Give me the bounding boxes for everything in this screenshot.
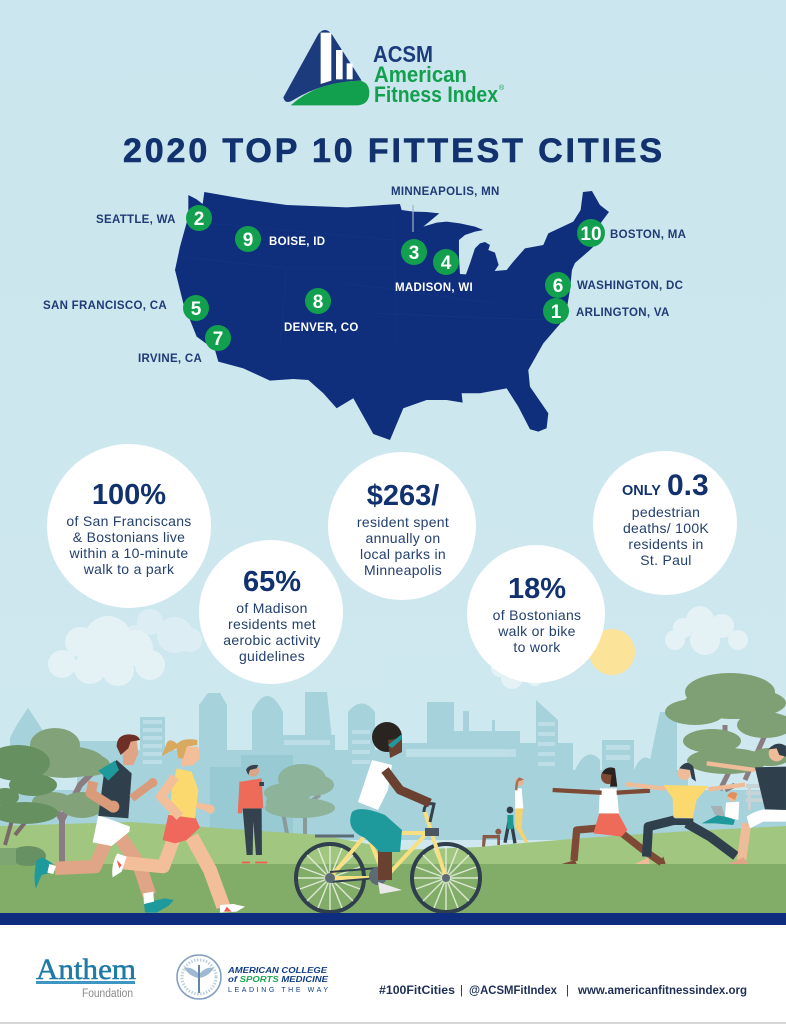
map marker: 10 Boston: [577, 219, 686, 247]
ground: dark green: [0, 864, 786, 913]
map marker: 4 Madison: MADISON, WI: [395, 282, 473, 294]
person: male runner: [34, 734, 174, 913]
footer links: @ACSMFitIndex: [469, 985, 558, 997]
stat circle: only 0.3: [593, 451, 737, 595]
person: yoga man: [707, 744, 786, 864]
footer links: www.americanfitnessindex.org: [577, 985, 747, 997]
map marker: 2 Seattle: [96, 205, 212, 231]
map marker: 2 Seattle: SEATTLE, WA: [96, 214, 176, 226]
tree: right park: [665, 673, 786, 790]
stat circle: 18%: 18%: [508, 573, 566, 605]
wordmark: American College of Sports Medicine: of SPORTS MEDICINE: [228, 974, 328, 984]
person: woman walking with child and dog: [482, 777, 528, 847]
map marker: 9 Boise: 9: [243, 230, 253, 251]
footer links: [379, 985, 747, 997]
map marker: 4 Madison: [395, 249, 473, 294]
stat circle: 18%: to work: [513, 639, 561, 655]
title: 2020 TOP 10 FITTEST CITIES: [123, 132, 662, 170]
logo: ACSM American Fitness Index: ACSM: [373, 41, 433, 67]
map marker: 5 San Francisco: SAN FRANCISCO, CA: [43, 300, 167, 312]
stat circle: only 0.3: deaths/ 100K: [623, 520, 709, 536]
stat circle: 100%: within a 10-minute: [68, 545, 189, 561]
stat circle: $263: [328, 452, 476, 600]
footer links: |: [566, 985, 569, 997]
stat circle: 100%: 100%: [92, 479, 166, 511]
wordmark: American College of Sports Medicine: AMERICAN COLLEGE: [227, 965, 327, 975]
skyline windows: [143, 720, 630, 766]
stat circle: 65%: guidelines: [239, 648, 305, 664]
map marker: 7 Irvine: [138, 325, 231, 365]
person: seated woman with laptop: [702, 792, 739, 825]
hill: light green: [0, 822, 786, 880]
stat circle: 100%: walk to a park: [83, 561, 175, 577]
background building block: [210, 755, 293, 835]
tree: mid-ground: [264, 764, 335, 834]
stat circle: $263: Minneapolis: [364, 562, 442, 578]
clouds: [48, 606, 748, 689]
map marker: 4 Madison: 4: [441, 253, 452, 274]
footer links: |: [460, 985, 463, 997]
stat circle: 65%: of Madison: [236, 600, 308, 616]
stat circle: 100%: [47, 444, 211, 608]
stat circle: 65%: [199, 540, 343, 684]
wordmark: American College of Sports Medicine: [227, 965, 328, 994]
map marker: 2 Seattle: 2: [194, 209, 204, 230]
stat circle: 65%: aerobic activity: [223, 632, 321, 648]
stat circle: 100%: of San Franciscans: [66, 513, 192, 529]
map marker: 8 Denver: DENVER, CO: [284, 322, 359, 334]
stat circle: 18%: walk or bike: [497, 623, 576, 639]
stat circle: $263: $263/: [367, 480, 439, 512]
cyclist on bicycle: [296, 722, 480, 912]
logo: American College of Sports Medicine seal: [177, 955, 221, 999]
stat circle: 18%: of Bostonians: [493, 607, 581, 623]
logo: Anthem Foundation: Anthem: [36, 953, 136, 986]
map marker: 5 San Francisco: [43, 295, 209, 321]
map marker: 1 Arlington: 1: [551, 302, 562, 323]
stat circle: only 0.3: ONLY: [622, 483, 661, 499]
logo: ACSM American Fitness Index: ®: [499, 84, 505, 92]
sun: [589, 629, 635, 675]
map marker: 6 Washington: WASHINGTON, DC: [577, 280, 683, 292]
map marker: 7 Irvine: 7: [213, 329, 223, 350]
skyline: [0, 692, 786, 840]
map marker: 9 Boise: BOISE, ID: [269, 236, 325, 248]
footer links: #100FitCities: [379, 985, 455, 997]
map marker: 3 Minneapolis: [391, 186, 500, 265]
stat circle: 65%: 65%: [243, 566, 301, 598]
stat circle: 18%: [467, 545, 605, 683]
stat circle: only 0.3: 0.3: [667, 469, 709, 502]
logo: ACSM American Fitness Index: [283, 30, 505, 107]
map marker: 8 Denver: 8: [313, 292, 323, 313]
logo: Anthem Foundation: [36, 953, 136, 1000]
person: standing with phone: [240, 765, 267, 863]
person: female runner: [112, 739, 245, 913]
footer panel: [0, 925, 786, 1022]
stat circle: only 0.3: pedestrian: [632, 504, 700, 520]
map marker: 3 Minneapolis: 3: [409, 243, 419, 264]
map marker: 8 Denver: [284, 288, 359, 334]
stat circle: $263: annually on: [366, 530, 440, 546]
logo: Anthem Foundation: Foundation: [82, 988, 133, 1000]
map: United States: [175, 191, 609, 440]
map marker: 1 Arlington: [543, 298, 670, 324]
map marker: 6 Washington: [545, 272, 683, 298]
logo: ACSM American Fitness Index: American: [374, 62, 467, 87]
map marker: 10 Boston: BOSTON, MA: [610, 229, 686, 241]
map marker: 9 Boise: [235, 226, 325, 252]
stat circle: 65%: residents met: [228, 616, 316, 632]
person: yoga woman in red shorts: [553, 767, 666, 864]
map marker: 5 San Francisco: 5: [191, 299, 202, 320]
map marker: 1 Arlington: ARLINGTON, VA: [576, 307, 670, 319]
person: yoga woman in yellow top: [625, 763, 745, 864]
wordmark: American College of Sports Medicine: LEADING THE WAY: [228, 987, 328, 994]
tree: left park: [0, 728, 110, 866]
stat circle: $263: resident spent: [357, 514, 449, 530]
map marker: 7 Irvine: IRVINE, CA: [138, 353, 202, 365]
stat circle: only 0.3: St. Paul: [640, 552, 692, 568]
map marker: 6 Washington: 6: [553, 276, 563, 297]
stat circle: only 0.3: residents in: [628, 536, 704, 552]
map marker: 3 Minneapolis: MINNEAPOLIS, MN: [391, 186, 500, 198]
navy band: [0, 913, 786, 925]
logo: ACSM American Fitness Index: Fitness Index: [374, 82, 499, 107]
bench: [746, 784, 768, 810]
stat circle: $263: local parks in: [360, 546, 446, 562]
stat circle: 100%: & Bostonians live: [73, 529, 185, 545]
map marker: 10 Boston: 10: [580, 224, 602, 245]
